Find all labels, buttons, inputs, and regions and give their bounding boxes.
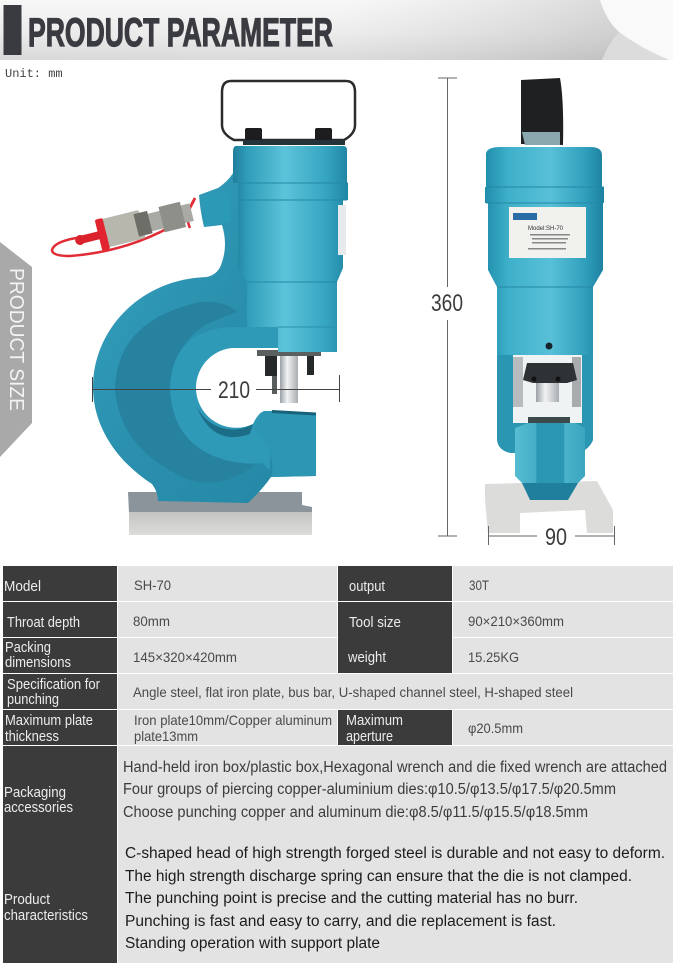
hydraulic coupling with red cap xyxy=(52,197,196,257)
cylinder xyxy=(485,147,604,355)
row: specification for punching: Specification for xyxy=(7,677,100,693)
lower block xyxy=(254,411,316,477)
title: PRODUCT PARAMETER xyxy=(28,11,333,55)
handle xyxy=(222,81,355,145)
row: maximum plate thickness and aperture: Maximum xyxy=(346,713,403,729)
die recess xyxy=(115,302,257,483)
hex block xyxy=(515,417,585,500)
row: packing dimensions and weight xyxy=(5,640,519,671)
row: throat depth and tool size: Tool size xyxy=(349,615,401,631)
row: specification for punching: Angle steel, flat iron plate, bus bar, U-shaped channel steel, H-shaped steel xyxy=(133,684,573,700)
row: maximum plate thickness and aperture: Iron plate10mm/Copper aluminum xyxy=(134,712,332,728)
row: packaging accessories: accessories xyxy=(4,800,73,816)
cylinder xyxy=(233,146,348,352)
row: packaging accessories xyxy=(4,759,667,821)
row: packaging accessories: Four groups of piercing copper-aluminium dies:φ10.5/φ13.5/φ17.5/φ20.5mm xyxy=(123,781,616,798)
frame behind cylinder xyxy=(497,325,593,453)
row: maximum plate thickness and aperture: plate13mm xyxy=(134,728,198,744)
front view of hydraulic punch xyxy=(485,78,613,533)
handle side xyxy=(521,78,563,145)
dimension: width 210 xyxy=(92,375,340,404)
row: product characteristics: C-shaped head of high strength forged steel is durable and not easy to deform. xyxy=(125,845,665,862)
table value cells xyxy=(118,566,673,963)
nameplate: Model:SH-70 xyxy=(528,226,564,232)
base plate xyxy=(485,481,613,533)
row: throat depth and tool size: 90×210×360mm xyxy=(468,613,564,629)
row: product characteristics: The punching point is precise and the cutting material has no burr. xyxy=(125,890,578,907)
base plate xyxy=(128,492,312,535)
lower lip shadow inside throat xyxy=(196,405,253,437)
parameter table xyxy=(3,566,673,963)
row: throat depth and tool size xyxy=(7,613,564,631)
row: product characteristics xyxy=(4,845,665,952)
row: packing dimensions and weight: dimensions xyxy=(5,655,71,671)
side tab: product size: PRODUCT SIZE xyxy=(5,268,27,411)
row: model and output: SH-70 xyxy=(134,577,171,593)
hose bracket xyxy=(204,190,231,226)
row: throat depth and tool size: Throat depth xyxy=(7,615,80,631)
row: maximum plate thickness and aperture: aperture xyxy=(346,729,393,745)
side tab: product size xyxy=(0,242,32,457)
header banner xyxy=(0,0,673,60)
row: product characteristics: The high strength discharge spring can ensure that the die is not clamped. xyxy=(125,868,632,885)
row: model and output: Model xyxy=(4,579,41,595)
row: packing dimensions and weight: 15.25KG xyxy=(468,649,519,665)
row: specification for punching xyxy=(7,677,573,708)
row: specification for punching: punching xyxy=(7,692,59,708)
nameplate xyxy=(509,207,586,258)
row: product characteristics: Punching is fast and easy to carry, and die replacement is fast. xyxy=(125,913,556,930)
dimension: height 360: 360 xyxy=(431,290,463,317)
row: model and output: 30T xyxy=(469,577,489,593)
header accent bar xyxy=(4,5,22,55)
row: model and output xyxy=(4,577,489,595)
row: maximum plate thickness and aperture xyxy=(5,712,523,745)
row: throat depth and tool size: 80mm xyxy=(133,613,170,629)
dimension: width 210: 210 xyxy=(218,377,250,404)
row: model and output: output xyxy=(349,579,385,595)
row: product characteristics: Product xyxy=(4,892,50,908)
row: packaging accessories: Choose punching copper and aluminum die:φ8.5/φ11.5/φ15.5/φ18.5mm xyxy=(123,804,588,821)
row: packing dimensions and weight: Packing xyxy=(5,640,51,656)
row: packaging accessories: Packaging xyxy=(4,785,66,801)
side view of hydraulic punch xyxy=(52,81,355,535)
dimension: depth 90: 90 xyxy=(545,524,567,551)
row: maximum plate thickness and aperture: thickness xyxy=(5,729,59,745)
table label cells xyxy=(3,566,452,963)
row: packing dimensions and weight: weight xyxy=(347,650,386,666)
throat opening xyxy=(196,348,282,428)
row: packing dimensions and weight: 145×320×420mm xyxy=(133,649,237,665)
C-frame xyxy=(93,168,316,503)
row: maximum plate thickness and aperture: φ20.5mm xyxy=(468,720,523,736)
row: product characteristics: characteristics xyxy=(4,908,88,924)
punch tip and collar xyxy=(257,350,321,403)
dimension: depth 90 xyxy=(488,524,614,551)
dimension: height 360 xyxy=(431,78,463,536)
unit note: Unit: mm xyxy=(5,67,63,81)
row: product characteristics: Standing operation with support plate xyxy=(125,935,380,952)
opening xyxy=(513,355,582,423)
ring around throat xyxy=(170,327,278,470)
row: maximum plate thickness and aperture: Maximum plate xyxy=(5,713,93,729)
